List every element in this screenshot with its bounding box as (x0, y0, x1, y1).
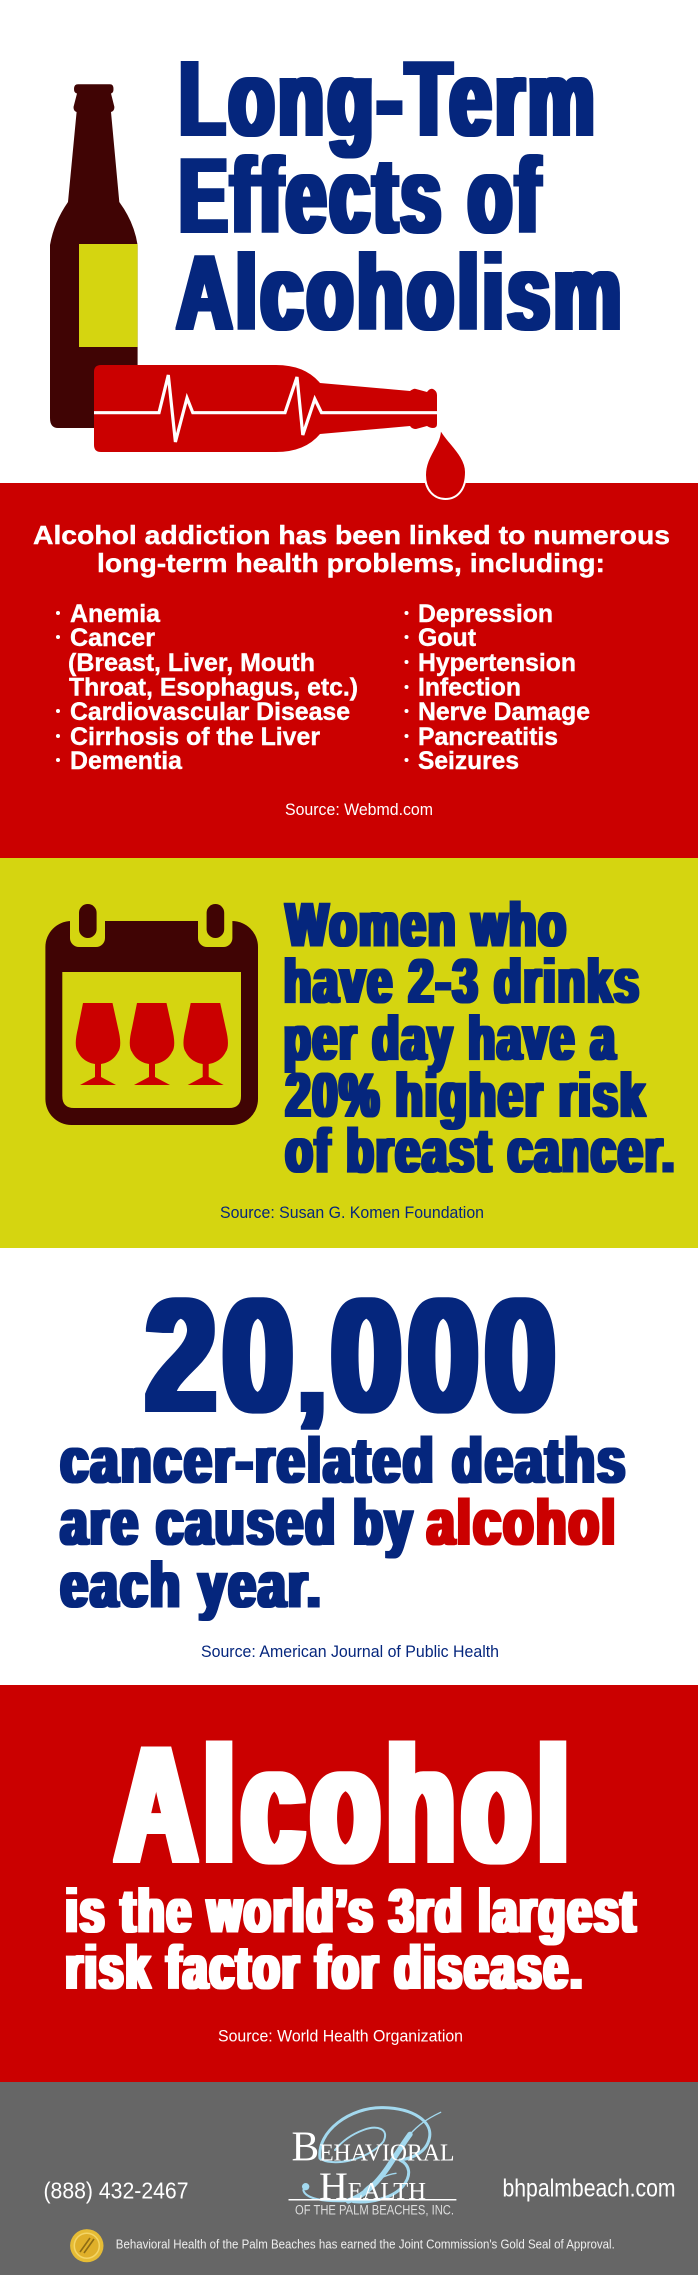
gold seal statement: Behavioral Health of the Palm Beaches has earned the Joint Commission's Gold Seal of Approval. (116, 2237, 615, 2252)
intro heading (33, 520, 670, 578)
phone number: (888) 432-2467 (44, 2178, 188, 2204)
risk factor statement (66, 1877, 638, 2002)
deaths statement: alcohol (427, 1486, 618, 1558)
left column list (56, 600, 358, 775)
left column list: Cardiovascular Disease (70, 698, 350, 726)
logo: behavioral health (288, 2108, 456, 2218)
source: who: Source: World Health Organization (218, 2027, 463, 2046)
logo: behavioral health: OF THE PALM BEACHES, INC. (295, 2203, 454, 2218)
left column list: Cancer (70, 624, 155, 652)
icon: gold seal (70, 2229, 104, 2262)
panel: list of health problems (0, 483, 698, 858)
right column list (404, 600, 590, 775)
source: ajph: Source: American Journal of Public Health (201, 1642, 499, 1661)
deaths statement (60, 1425, 628, 1621)
left column list: Anemia (70, 600, 161, 628)
left column list: Dementia (70, 747, 183, 775)
icon: red drop (425, 428, 466, 499)
panel: footer (0, 2082, 698, 2275)
icon: red tipped bottle with pulse line (94, 365, 437, 452)
source: webmd: Source: Webmd.com (285, 800, 433, 819)
right column list: Depression (418, 600, 553, 628)
logo: behavioral health: HEALTH (319, 2165, 426, 2208)
right column list: Gout (418, 624, 477, 652)
panel: third largest risk factor (0, 1685, 698, 2082)
panel: hero with title and bottles (50, 40, 625, 499)
deaths statement: are caused by (60, 1486, 414, 1558)
breast cancer statement (284, 891, 676, 1186)
left column list: (Breast, Liver, Mouth (68, 649, 315, 677)
deaths statement: each year. (60, 1549, 323, 1621)
right column list: Infection (418, 674, 521, 702)
right column list: Seizures (418, 747, 519, 775)
title (177, 40, 625, 352)
panel: 20,000 deaths (0, 1248, 698, 1685)
big number: 20,000 (146, 1266, 562, 1444)
intro heading: long-term health problems, including: (97, 548, 605, 578)
left column list: Throat, Esophagus, etc.) (69, 674, 358, 702)
right column list: Nerve Damage (418, 698, 590, 726)
left column list: Cirrhosis of the Liver (70, 723, 320, 751)
icon: dark standing bottle (50, 84, 138, 428)
breast cancer statement: Women who (286, 891, 568, 960)
intro heading: Alcohol addiction has been linked to numerous (33, 520, 670, 550)
icon: calendar with three glasses (45, 904, 258, 1125)
panel: breast cancer risk (0, 858, 698, 1248)
right column list: Hypertension (418, 649, 576, 677)
logo: behavioral health: BEHAVIORAL (292, 2125, 454, 2171)
source: komen: Source: Susan G. Komen Foundation (220, 1203, 484, 1222)
right column list: Pancreatitis (418, 723, 558, 751)
